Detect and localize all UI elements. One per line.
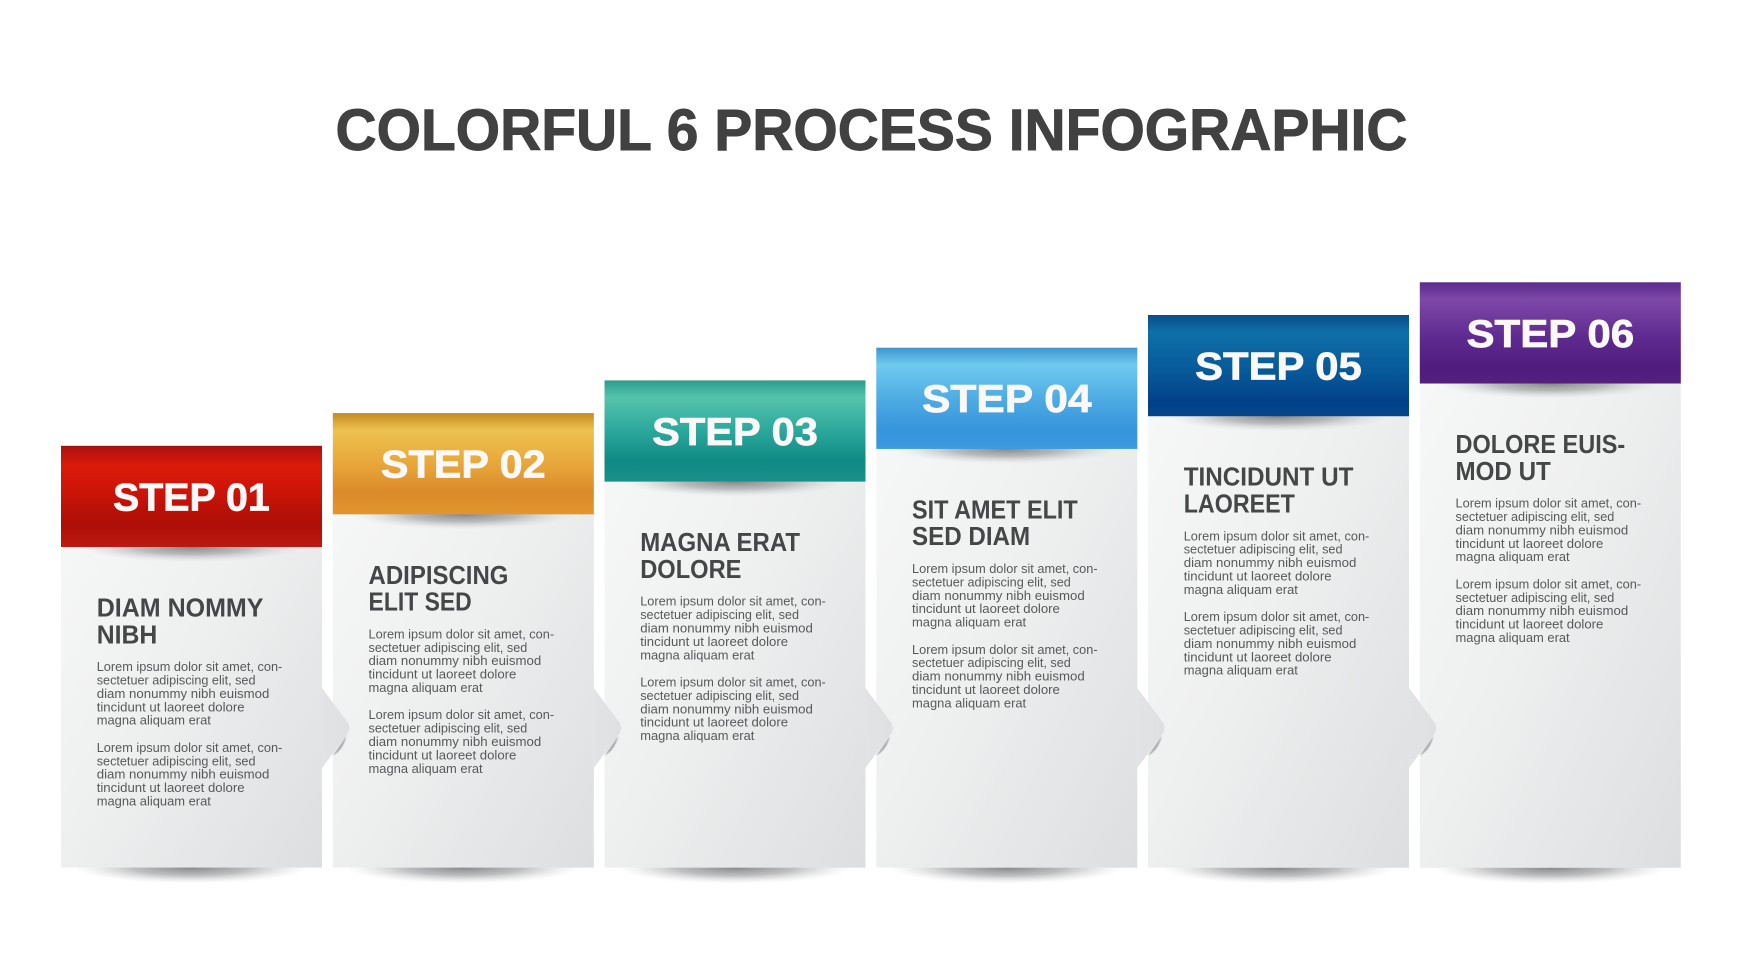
body text 02: diam nonummy nibh euismod	[369, 734, 541, 749]
body text 03: Lorem ipsum dolor sit amet, con-	[640, 675, 826, 690]
body text 01: tincidunt ut laoreet dolore	[97, 699, 245, 714]
body text 03: sectetuer adipiscing elit, sed	[640, 688, 799, 703]
body text 04: magna aliquam erat	[912, 615, 1027, 630]
body text 05: magna aliquam erat	[1184, 663, 1298, 678]
body text 04: Lorem ipsum dolor sit amet, con-	[912, 642, 1098, 657]
heading 05: TINCIDUNT UT	[1184, 464, 1354, 492]
body text 03: magna aliquam erat	[640, 647, 755, 662]
body text 06: sectetuer adipiscing elit, sed	[1456, 509, 1614, 524]
body text 06: magna aliquam erat	[1456, 549, 1570, 564]
body text 04: tincidunt ut laoreet dolore	[912, 682, 1060, 697]
step label 01: STEP 01	[113, 476, 270, 519]
heading 03: DOLORE	[640, 556, 741, 584]
arrow: step 02 to 03	[594, 688, 621, 768]
body text 06: magna aliquam erat	[1456, 630, 1570, 645]
body text 03	[640, 594, 826, 743]
body text 01	[97, 659, 282, 809]
body text 04: Lorem ipsum dolor sit amet, con-	[912, 561, 1098, 576]
heading 04: SED DIAM	[912, 523, 1030, 551]
panel: step 06	[1420, 282, 1681, 884]
body text 01: diam nonummy nibh euismod	[97, 767, 269, 782]
body text 03: sectetuer adipiscing elit, sed	[640, 607, 799, 622]
body text 02: sectetuer adipiscing elit, sed	[369, 640, 527, 655]
heading 05: LAOREET	[1184, 490, 1295, 518]
title: COLORFUL 6 PROCESS INFOGRAPHIC	[336, 98, 1408, 163]
body text 05: diam nonummy nibh euismod	[1184, 636, 1356, 651]
step label 06: STEP 06	[1466, 313, 1634, 356]
panel: step 05	[1148, 315, 1409, 884]
body text 04: diam nonummy nibh euismod	[912, 588, 1085, 603]
body text 04: diam nonummy nibh euismod	[912, 669, 1085, 684]
step label 05: STEP 05	[1195, 346, 1362, 389]
body text 01: sectetuer adipiscing elit, sed	[97, 753, 256, 768]
body text 01: Lorem ipsum dolor sit amet, con-	[97, 659, 282, 674]
body text 02: diam nonummy nibh euismod	[369, 653, 541, 668]
heading 02: ELIT SED	[369, 589, 472, 617]
body text 01: Lorem ipsum dolor sit amet, con-	[97, 740, 282, 755]
body text 05: sectetuer adipiscing elit, sed	[1184, 542, 1343, 557]
body text 02	[369, 626, 554, 776]
body text 04: magna aliquam erat	[912, 695, 1027, 710]
panel: step 02	[333, 413, 594, 883]
heading 01: NIBH	[97, 621, 157, 649]
body text 03: Lorem ipsum dolor sit amet, con-	[640, 594, 826, 609]
body text 06: Lorem ipsum dolor sit amet, con-	[1456, 576, 1641, 591]
body text 03: diam nonummy nibh euismod	[640, 701, 813, 716]
body text 01: sectetuer adipiscing elit, sed	[97, 672, 256, 687]
body text 05: Lorem ipsum dolor sit amet, con-	[1184, 528, 1369, 543]
body text 02: sectetuer adipiscing elit, sed	[369, 721, 527, 736]
body text 02: magna aliquam erat	[369, 761, 483, 776]
body text 06: diam nonummy nibh euismod	[1456, 603, 1628, 618]
body text 05: sectetuer adipiscing elit, sed	[1184, 623, 1343, 638]
body text 02: magna aliquam erat	[369, 680, 483, 695]
body text 06	[1456, 496, 1641, 645]
body text 05	[1184, 528, 1369, 678]
heading 06: DOLORE EUIS-	[1456, 431, 1625, 459]
body text 06: Lorem ipsum dolor sit amet, con-	[1456, 496, 1641, 511]
arrow: step 01 to 02	[322, 688, 349, 768]
body text 03: diam nonummy nibh euismod	[640, 620, 813, 635]
body text 04: tincidunt ut laoreet dolore	[912, 601, 1060, 616]
body text 04: sectetuer adipiscing elit, sed	[912, 655, 1071, 670]
body text 05: tincidunt ut laoreet dolore	[1184, 649, 1332, 664]
body text 05: Lorem ipsum dolor sit amet, con-	[1184, 609, 1369, 624]
body text 05: diam nonummy nibh euismod	[1184, 555, 1356, 570]
arrow: step 03 to 04	[866, 688, 893, 768]
heading 06: MOD UT	[1456, 458, 1551, 486]
body text 02: tincidunt ut laoreet dolore	[369, 667, 516, 682]
body text 02: Lorem ipsum dolor sit amet, con-	[369, 626, 554, 641]
step label 04: STEP 04	[922, 378, 1092, 421]
body text 06: diam nonummy nibh euismod	[1456, 522, 1628, 537]
body text 02: Lorem ipsum dolor sit amet, con-	[369, 707, 554, 722]
body text 06: sectetuer adipiscing elit, sed	[1456, 590, 1614, 605]
body text 04	[912, 561, 1098, 710]
body text 01: tincidunt ut laoreet dolore	[97, 780, 245, 795]
arrow: step 05 to 06	[1409, 688, 1436, 768]
panel: step 04	[876, 348, 1137, 884]
body text 03: tincidunt ut laoreet dolore	[640, 634, 788, 649]
step label 03: STEP 03	[652, 411, 818, 454]
step label 02: STEP 02	[381, 444, 546, 487]
body text 01: magna aliquam erat	[97, 794, 211, 809]
heading 03: MAGNA ERAT	[640, 529, 800, 557]
body text 06: tincidunt ut laoreet dolore	[1456, 617, 1603, 632]
panel: step 01	[61, 446, 322, 883]
body text 04: sectetuer adipiscing elit, sed	[912, 574, 1071, 589]
heading 01: DIAM NOMMY	[97, 594, 263, 622]
arrow: step 04 to 05	[1137, 688, 1165, 768]
body text 06: tincidunt ut laoreet dolore	[1456, 536, 1603, 551]
body text 03: tincidunt ut laoreet dolore	[640, 715, 788, 730]
body text 02: tincidunt ut laoreet dolore	[369, 747, 516, 762]
body text 01: diam nonummy nibh euismod	[97, 686, 269, 701]
body text 01: magna aliquam erat	[97, 713, 211, 728]
body text 05: tincidunt ut laoreet dolore	[1184, 568, 1332, 583]
heading 04: SIT AMET ELIT	[912, 496, 1078, 524]
panel: step 03	[604, 380, 866, 884]
heading 02: ADIPISCING	[369, 562, 508, 590]
body text 05: magna aliquam erat	[1184, 582, 1298, 597]
body text 03: magna aliquam erat	[640, 728, 755, 743]
